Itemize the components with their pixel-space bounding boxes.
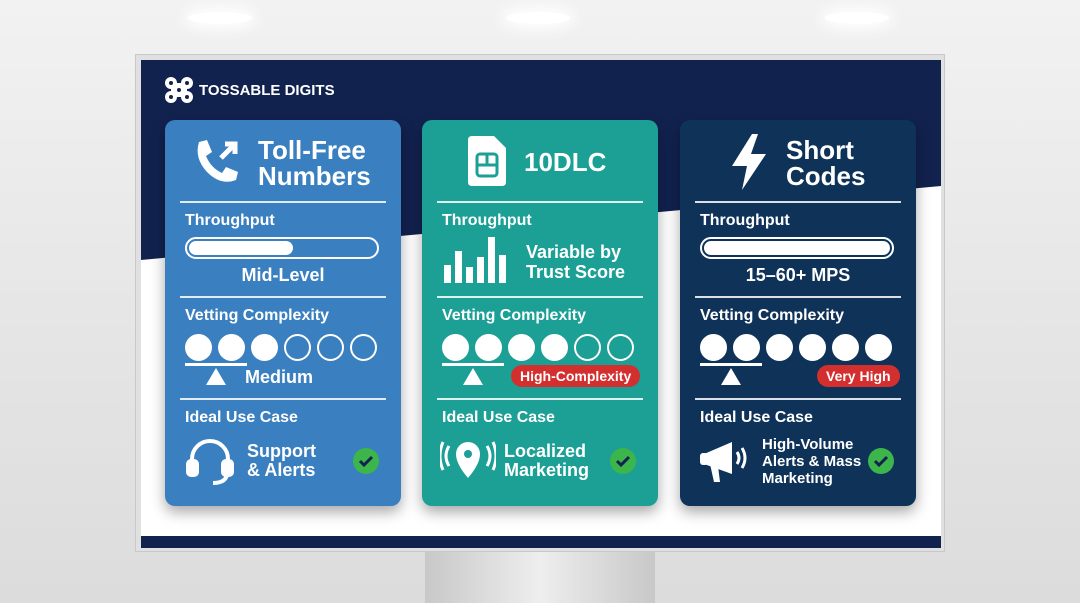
- panel: 10DLC: Localized: [504, 441, 586, 461]
- icon: phone: [198, 140, 238, 182]
- icon: headset: [186, 439, 234, 485]
- icon: sim card: [468, 136, 506, 186]
- panel: short codes: Ideal Use Case: [700, 409, 813, 426]
- panel: toll-free: Toll-Free: [258, 135, 366, 165]
- panel: toll-free: Numbers: [258, 161, 371, 191]
- panel: toll-free: Medium: [245, 367, 313, 387]
- panel: short codes: [680, 120, 916, 506]
- panel: toll-free: Mid-Level: [241, 265, 324, 285]
- panel: short codes: Very High: [826, 368, 891, 384]
- logo: TOSSABLE DIGITS: [199, 82, 335, 98]
- panel: 10DLC: Throughput: [442, 212, 532, 229]
- panel: 10DLC: Variable by: [526, 242, 621, 262]
- panel: 10DLC: 10DLC: [524, 147, 606, 177]
- panel: 10DLC: Vetting Complexity: [442, 307, 586, 324]
- panel: 10DLC: Ideal Use Case: [442, 409, 555, 426]
- panel: toll-free: Support: [247, 441, 316, 461]
- panel: 10DLC: High-Complexity: [520, 368, 631, 384]
- panel: toll-free: Throughput: [185, 212, 275, 229]
- monitor screen: [135, 54, 945, 552]
- icon: lightning: [732, 134, 766, 190]
- panel: toll-free: & Alerts: [247, 460, 315, 480]
- panel: toll-free: Ideal Use Case: [185, 409, 298, 426]
- panel: short codes: Vetting Complexity: [700, 307, 844, 324]
- logo: [165, 77, 335, 103]
- stand: [425, 548, 655, 603]
- panel: short codes: Alerts & Mass: [762, 453, 861, 470]
- icon: megaphone: [700, 442, 746, 482]
- panel: short codes: High-Volume: [762, 436, 853, 453]
- panel: 10DLC: [422, 120, 658, 506]
- panel: 10DLC: Marketing: [504, 460, 589, 480]
- panel: short codes: Throughput: [700, 212, 790, 229]
- panel: toll-free: Vetting Complexity: [185, 307, 329, 324]
- panel: short codes: Marketing: [762, 470, 833, 487]
- panel: short codes: Short: [786, 135, 854, 165]
- panel: short codes: Codes: [786, 161, 865, 191]
- panel: toll-free: [165, 120, 401, 506]
- icon: bars: [444, 237, 506, 283]
- icon: location: [440, 441, 496, 478]
- panel: 10DLC: Trust Score: [526, 262, 625, 282]
- panel: short codes: 15–60+ MPS: [746, 265, 850, 285]
